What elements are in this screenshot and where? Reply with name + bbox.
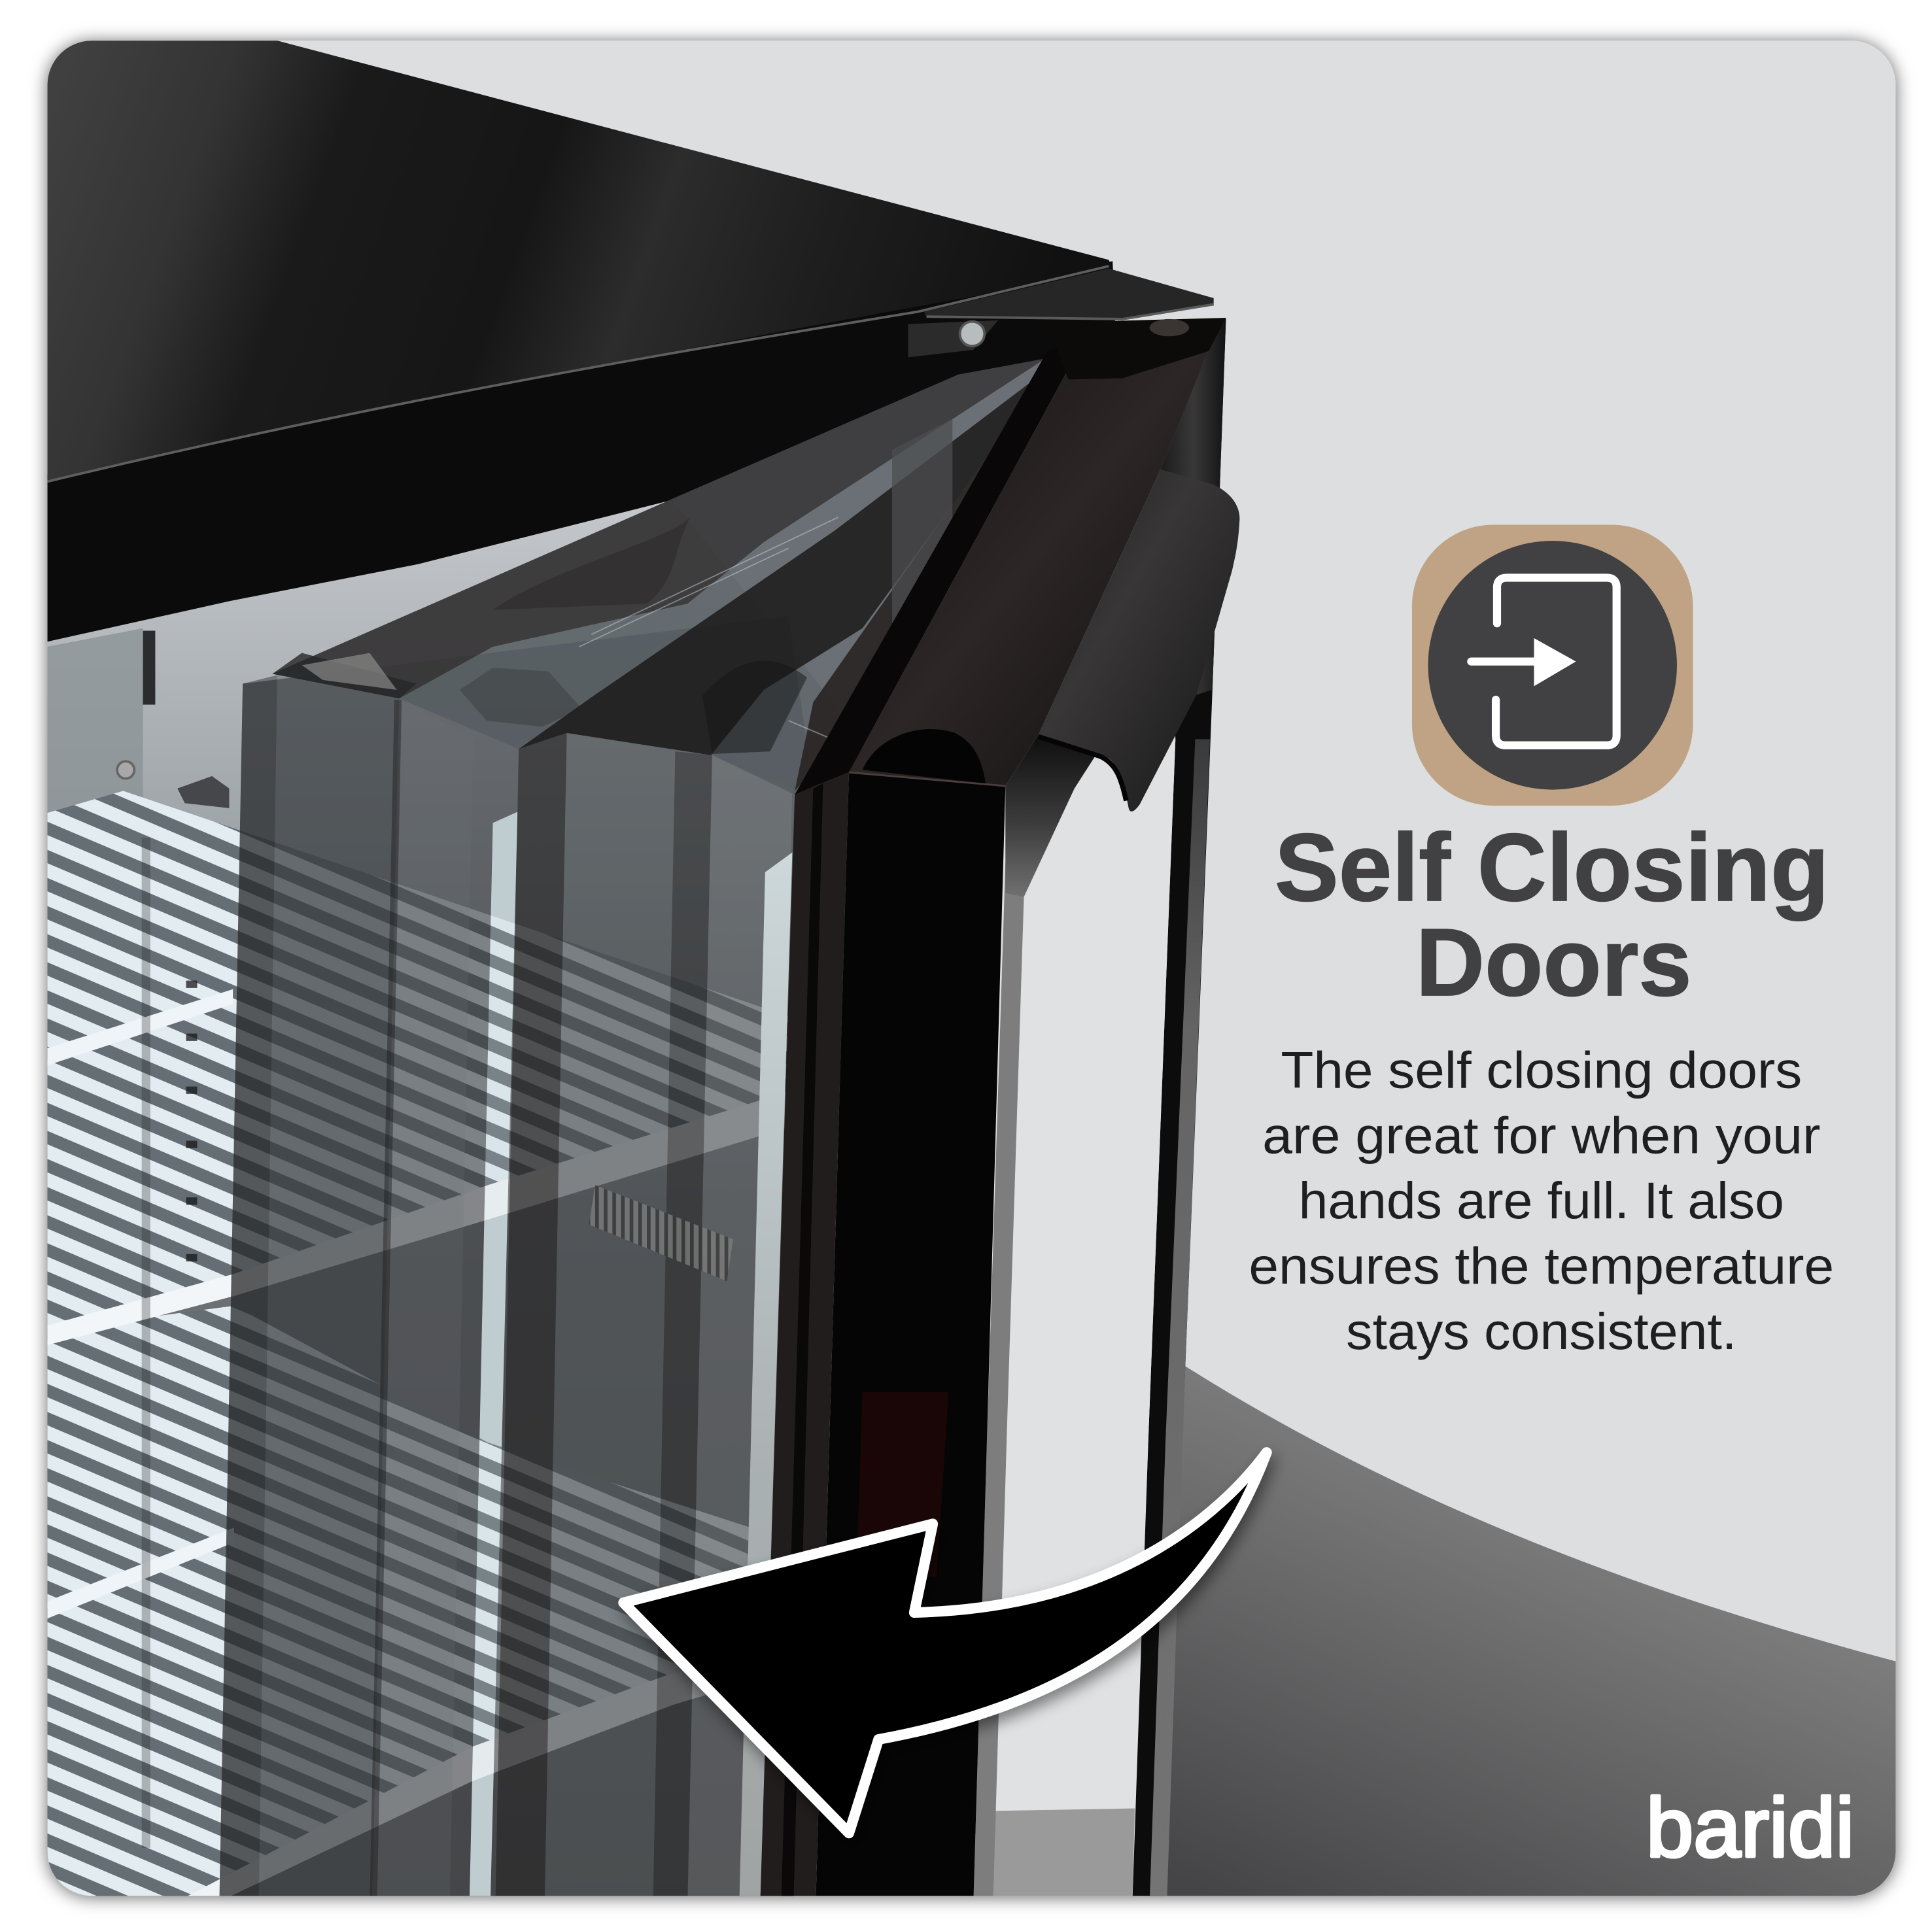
body text: stays consistent.	[1346, 1302, 1736, 1360]
door three upper panel	[849, 337, 1209, 786]
light glass edge one	[47, 791, 789, 1904]
door three front post	[816, 772, 1005, 1904]
body text: hands are full. It also	[1299, 1171, 1784, 1229]
door three black strip	[795, 337, 1086, 795]
right door frame	[1131, 318, 1226, 1904]
fridge front rail	[47, 261, 1115, 642]
wall post	[143, 631, 155, 705]
frame upper face	[1161, 318, 1226, 695]
hinge lower block	[1047, 318, 1226, 379]
door three grey edge	[973, 863, 1024, 1904]
door two frame columns	[495, 733, 567, 1904]
screw on wall	[117, 761, 134, 779]
upper glass door two	[519, 369, 1047, 755]
wire shelves	[47, 791, 789, 1904]
upper glass door one	[272, 351, 1072, 795]
metal side panel	[47, 628, 143, 823]
door handle	[1039, 470, 1239, 812]
light glass edge two	[739, 853, 792, 1904]
glass door one rim	[272, 653, 417, 698]
body text: are great for when your	[1262, 1106, 1820, 1164]
upper glass door three side	[795, 369, 1047, 791]
post rim	[849, 772, 1005, 786]
upper glass dark band	[272, 357, 1047, 698]
body text: ensures the temperature	[1249, 1237, 1834, 1295]
door one frame columns	[219, 675, 277, 1904]
logo: baridi	[1646, 1781, 1854, 1875]
floor	[1146, 1366, 1897, 1904]
title: Self Closing	[1275, 814, 1829, 921]
window floor reflection	[993, 1809, 1135, 1904]
shelf bracket	[177, 776, 229, 808]
door three window glass	[993, 739, 1175, 1904]
hinge plate	[924, 269, 1214, 320]
hinge pivot	[1150, 319, 1189, 336]
fridge interior wall	[47, 499, 863, 1904]
barcode	[589, 1185, 733, 1281]
glass reflections	[702, 661, 807, 754]
door glass tint	[219, 616, 813, 1904]
title: Doors	[1416, 909, 1692, 1016]
glass hexagon reflection	[460, 668, 581, 726]
icon: door with arrow	[1412, 525, 1693, 806]
title	[1275, 814, 1829, 1016]
door three lower chevron	[1005, 734, 1097, 897]
door three gasket	[760, 772, 849, 1904]
glass light patch	[892, 419, 952, 641]
hinge screw	[960, 322, 984, 346]
rail highlight	[47, 266, 1109, 482]
hinge bracket	[908, 320, 998, 357]
frame grey edge	[1150, 739, 1210, 1904]
fridge top surface	[47, 41, 1113, 481]
body text: The self closing doors	[1281, 1040, 1802, 1099]
arrow	[623, 1452, 1267, 1833]
shelf slots	[186, 981, 197, 1261]
body text	[1249, 1040, 1834, 1360]
shelf uprights	[142, 838, 150, 1848]
post glare	[863, 729, 986, 783]
